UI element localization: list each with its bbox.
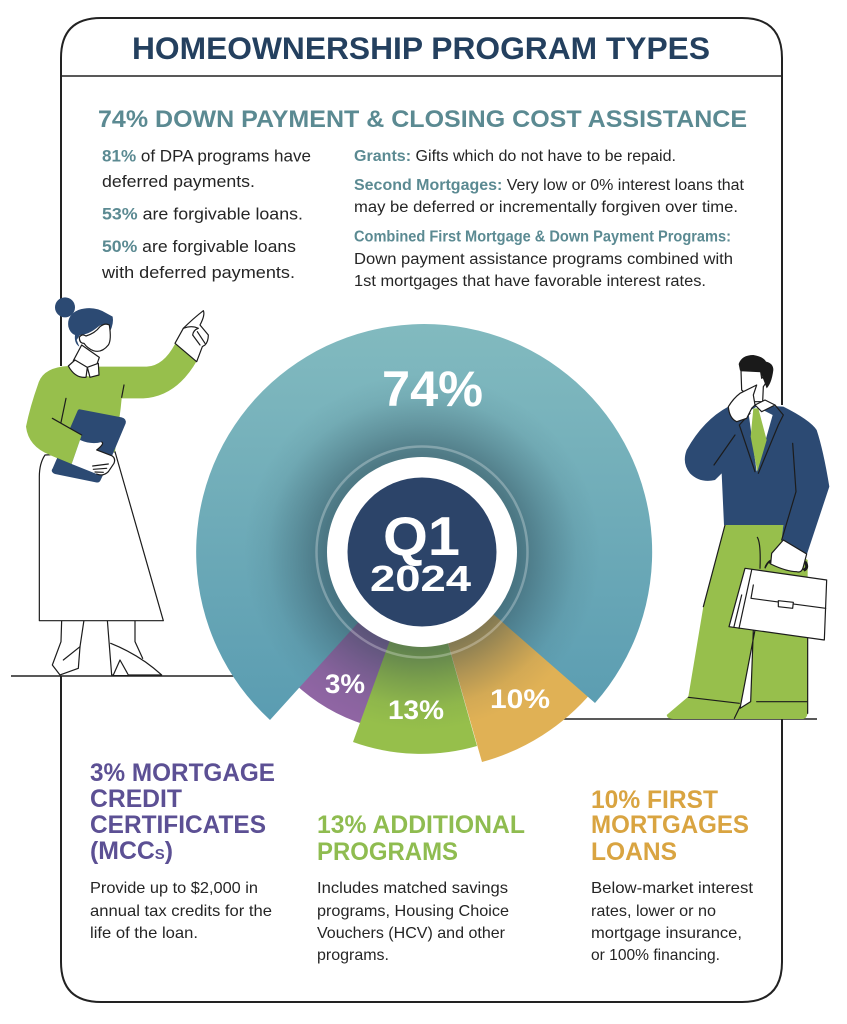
tie — [751, 408, 767, 472]
callout heading: CERTIFICATES — [90, 811, 266, 839]
donut chart — [196, 324, 652, 762]
tablet — [52, 409, 126, 483]
neck and face — [741, 371, 768, 402]
program definitions column: Combined First Mortgage & Down Payment Programs: — [354, 228, 731, 246]
callout heading: CREDIT — [90, 785, 182, 813]
centre disc — [348, 478, 496, 626]
statistics column: 50% are forgivable loans — [102, 238, 296, 256]
callout heading: MORTGAGES — [591, 811, 749, 839]
hair — [68, 308, 113, 347]
hair — [739, 355, 773, 388]
program definitions column: 1st mortgages that have favorable interest rates. — [354, 273, 706, 290]
callout body: life of the loan. — [90, 925, 198, 942]
callout body: Vouchers (HCV) and other — [317, 925, 506, 942]
centre label: 2024: 2024 — [370, 558, 471, 599]
figure: man with briefcase — [667, 355, 829, 719]
sweater — [26, 344, 197, 465]
callout body: programs. — [317, 947, 389, 964]
gap between legs — [740, 630, 755, 708]
bun — [55, 297, 75, 317]
statistics column — [101, 148, 311, 282]
centre label: Q1: Q1 — [383, 505, 460, 567]
value: 3%: 3% — [325, 669, 365, 699]
collar — [755, 400, 775, 412]
pointing hand — [175, 311, 208, 362]
callout body: programs, Housing Choice — [317, 903, 509, 920]
sleeve — [40, 418, 82, 464]
program definitions column: may be deferred or incrementally forgiven over time. — [354, 199, 738, 216]
callout: mortgage credit certificates — [90, 759, 275, 942]
shirt — [748, 407, 773, 472]
sweater folds — [61, 385, 124, 424]
callout heading — [591, 786, 749, 866]
program definitions column: Grants: Gifts which do not have to be repaid. — [354, 148, 676, 165]
segment: 10% first mortgages — [422, 552, 592, 762]
callout heading — [90, 759, 275, 865]
section heading: 74% DOWN PAYMENT & CLOSING COST ASSISTANCE — [98, 106, 747, 133]
callout heading: 3% MORTGAGE — [90, 759, 275, 787]
panel: down payment assistance — [98, 106, 747, 290]
callout body: rates, lower or no — [591, 903, 716, 920]
callout heading: PROGRAMS — [317, 838, 458, 866]
callout body: mortgage insurance, — [591, 925, 742, 942]
header divider — [61, 75, 782, 77]
callout body — [591, 880, 754, 964]
program definitions column: Second Mortgages: Very low or 0% interest loans that — [354, 177, 745, 194]
segment: 3% mortgage credit certificates — [294, 552, 422, 725]
value: 13%: 13% — [388, 695, 444, 725]
callout heading: (MCCS) — [90, 837, 173, 865]
white ring — [327, 457, 517, 647]
program definitions column: Down payment assistance programs combined with — [354, 251, 733, 268]
statistics column: deferred payments. — [102, 173, 255, 191]
value: 10%: 10% — [490, 684, 550, 714]
neck — [73, 345, 99, 368]
briefcase handle — [766, 559, 807, 570]
raised hand — [728, 385, 757, 422]
callout: additional programs — [317, 811, 525, 964]
value: 74%: 74% — [382, 361, 483, 417]
cuff and gripping hand — [771, 540, 807, 572]
callout: first mortgages — [591, 786, 754, 964]
legs and shoes — [52, 620, 162, 675]
clasp — [778, 601, 793, 608]
right ground line — [560, 718, 817, 720]
callout body: Includes matched savings — [317, 880, 508, 897]
callout body — [317, 880, 509, 964]
statistics column: 81% of DPA programs have — [102, 148, 311, 166]
segment: 74% down payment — [196, 324, 652, 720]
callout body: annual tax credits for the — [90, 903, 272, 920]
callout heading: LOANS — [591, 838, 677, 866]
figure: woman pointing — [26, 297, 208, 675]
callout body: or 100% financing. — [591, 947, 720, 964]
left ground line — [11, 675, 240, 677]
inner shading — [244, 374, 600, 730]
callout heading: 10% FIRST — [591, 786, 718, 814]
briefcase — [729, 568, 827, 640]
program definitions column — [354, 148, 745, 290]
callout body: Provide up to $2,000 in — [90, 880, 258, 897]
handle fill — [765, 563, 807, 575]
callout body: Below-market interest — [591, 880, 754, 897]
jacket — [685, 405, 829, 555]
statistics column: with deferred payments. — [101, 264, 295, 282]
callout body — [90, 880, 272, 942]
trousers and shoes — [667, 525, 808, 719]
callout heading: 13% ADDITIONAL — [317, 811, 525, 839]
segment: 13% additional programs — [353, 552, 477, 754]
face — [79, 324, 110, 351]
skirt — [39, 452, 163, 621]
collar — [68, 360, 99, 377]
statistics column: 53% are forgivable loans. — [102, 206, 303, 224]
callout heading — [317, 811, 525, 866]
holding hand — [72, 440, 115, 475]
title: HOMEOWNERSHIP PROGRAM TYPES — [132, 30, 710, 66]
thin ring — [316, 446, 528, 658]
lapels — [739, 405, 783, 473]
